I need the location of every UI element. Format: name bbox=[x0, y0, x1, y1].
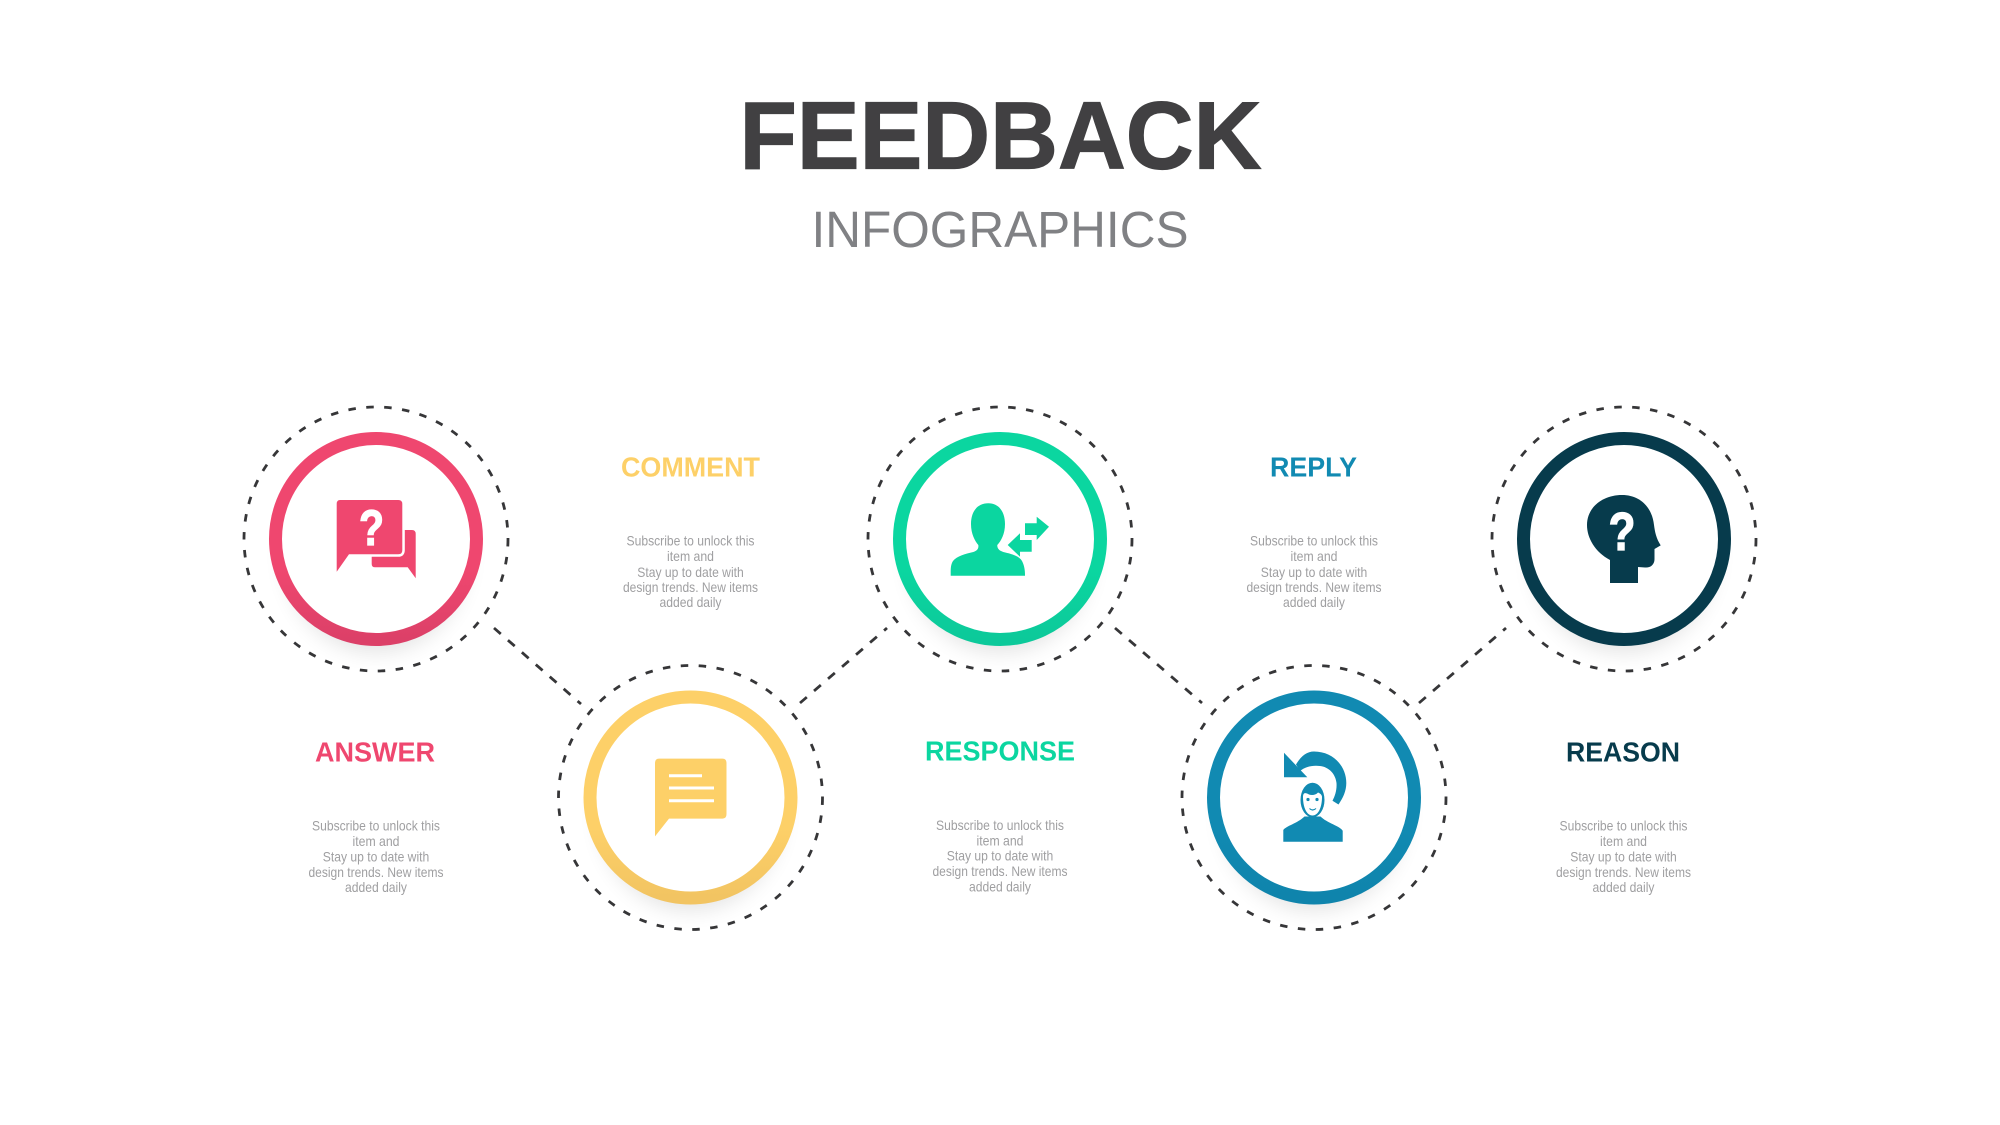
ring: response bbox=[900, 438, 1100, 640]
body text: reply: Stay up to date with bbox=[1261, 564, 1367, 580]
heading: reason: REASON bbox=[1566, 736, 1680, 768]
subtitle: INFOGRAPHICS bbox=[812, 201, 1188, 258]
body text: comment: design trends. New items bbox=[623, 579, 758, 595]
body text: comment: item and bbox=[667, 548, 714, 564]
panel: comment bbox=[558, 452, 822, 930]
body text: answer bbox=[308, 818, 444, 895]
panel: reply bbox=[1182, 452, 1446, 930]
ring shadow: reason bbox=[1532, 457, 1716, 653]
connector: answer to comment bbox=[494, 628, 581, 704]
body text: reason: design trends. New items bbox=[1556, 864, 1691, 880]
body text: answer: design trends. New items bbox=[308, 864, 444, 880]
body text: answer: Stay up to date with bbox=[323, 848, 429, 864]
title: FEEDBACK bbox=[740, 82, 1262, 190]
dashed ring: reply bbox=[1182, 666, 1446, 930]
body text: reply: Subscribe to unlock this bbox=[1250, 533, 1378, 549]
ring shadow: response bbox=[908, 457, 1092, 653]
icon: message bubble bbox=[655, 759, 726, 836]
ring: comment bbox=[590, 697, 791, 898]
body text: comment: Stay up to date with bbox=[637, 564, 744, 580]
body text: reason: Stay up to date with bbox=[1570, 848, 1677, 864]
ring: reason bbox=[1524, 438, 1724, 640]
ring shadow: answer bbox=[284, 457, 468, 653]
body text: reason bbox=[1556, 818, 1691, 895]
body text: response: Stay up to date with bbox=[947, 848, 1053, 864]
connector: comment to response bbox=[800, 628, 887, 703]
dashed ring: comment bbox=[558, 666, 822, 930]
ring: answer bbox=[276, 438, 476, 640]
heading: answer: ANSWER bbox=[315, 736, 435, 768]
ring shadow: reply bbox=[1222, 715, 1406, 911]
icon: head with question mark: ? bbox=[1608, 502, 1636, 562]
heading: response: RESPONSE bbox=[925, 736, 1075, 766]
connector: response to reply bbox=[1115, 628, 1202, 703]
icon: head with question mark bbox=[1587, 495, 1661, 583]
body text: comment: added daily bbox=[660, 594, 722, 610]
icon: person with return arrow bbox=[1283, 752, 1346, 842]
body text: answer: Subscribe to unlock this bbox=[312, 818, 440, 834]
body text: reason: Subscribe to unlock this bbox=[1560, 818, 1688, 834]
panel: reason bbox=[1492, 407, 1756, 895]
ring: reply bbox=[1214, 697, 1414, 898]
body text: response bbox=[932, 817, 1068, 894]
body text: comment bbox=[623, 533, 758, 610]
heading: comment: COMMENT bbox=[621, 452, 760, 482]
body text: reply: item and bbox=[1290, 548, 1338, 564]
dashed ring: answer bbox=[244, 407, 508, 671]
ring shadow: comment bbox=[598, 715, 782, 911]
icon: question speech bubbles: ? bbox=[359, 500, 384, 556]
icon: question speech bubbles bbox=[337, 500, 416, 578]
body text: comment: Subscribe to unlock this bbox=[626, 533, 754, 549]
body text: reason: added daily bbox=[1592, 879, 1654, 895]
body text: response: added daily bbox=[969, 878, 1031, 894]
body text: response: design trends. New items bbox=[932, 863, 1068, 879]
dashed ring: response bbox=[868, 407, 1132, 671]
body text: response: item and bbox=[976, 832, 1024, 848]
heading: reply: REPLY bbox=[1270, 452, 1357, 482]
body text: reply bbox=[1246, 533, 1382, 610]
panel: response bbox=[868, 407, 1132, 894]
body text: reply: added daily bbox=[1283, 594, 1345, 610]
body text: reason: item and bbox=[1600, 833, 1647, 849]
body text: answer: item and bbox=[352, 833, 400, 849]
connector: reply to reason bbox=[1419, 628, 1506, 703]
icon: person with exchange arrows bbox=[951, 503, 1049, 576]
body text: response: Subscribe to unlock this bbox=[936, 817, 1064, 833]
panel: answer bbox=[244, 407, 508, 895]
body text: answer: added daily bbox=[345, 879, 407, 895]
body text: reply: design trends. New items bbox=[1246, 579, 1382, 595]
dashed ring: reason bbox=[1492, 407, 1756, 671]
